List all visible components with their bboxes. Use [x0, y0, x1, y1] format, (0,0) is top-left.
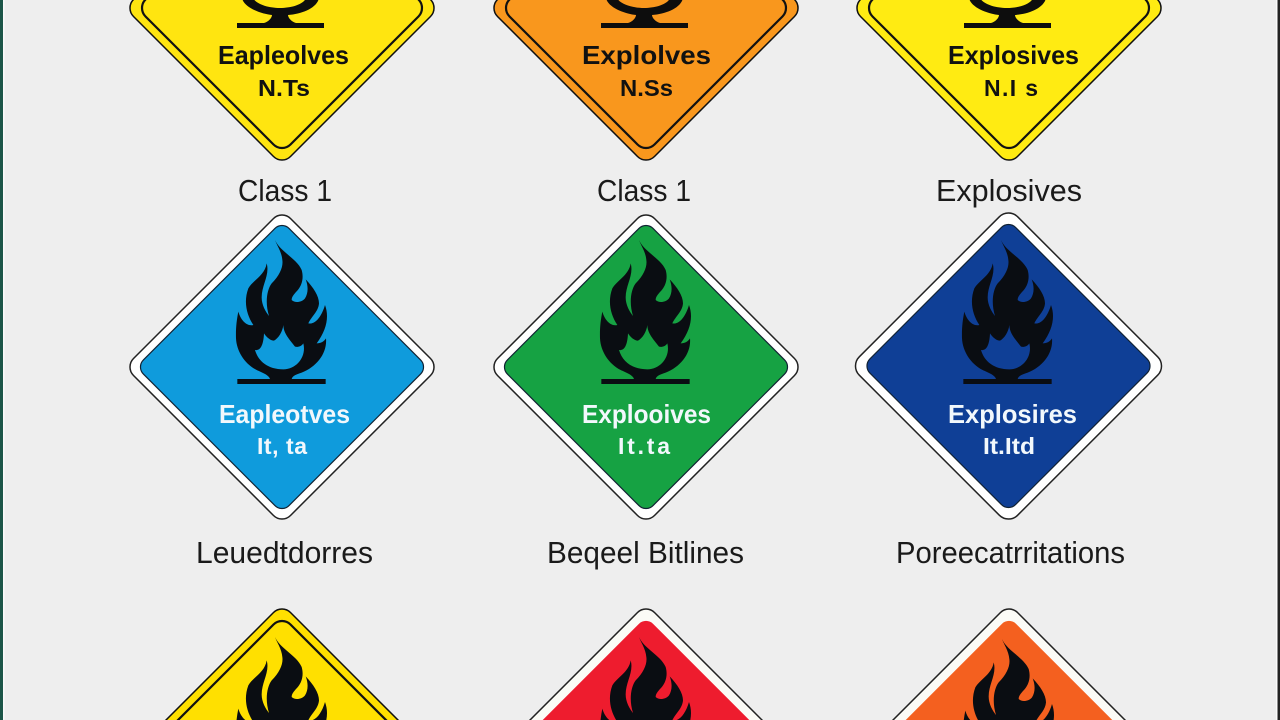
sign text: Explosives — [948, 40, 1079, 70]
icon: flame — [962, 240, 1053, 384]
label: Class 1, centre: Class 1 — [597, 173, 691, 208]
icon: explosion ring — [964, 0, 1051, 28]
icon: flame — [600, 240, 691, 384]
sign text: Eapleolves — [218, 40, 349, 70]
icon: explosion ring — [601, 0, 688, 28]
icon: flame — [600, 637, 691, 720]
label: Beqeel Bitlines: Beqeel Bitlines — [547, 535, 744, 570]
sign: yellow explosives, top right — [852, 0, 1166, 165]
sign: green flammable, middle centre — [489, 210, 803, 524]
sign: yellow explosives, top left — [125, 0, 439, 165]
sign code: It.ta — [618, 433, 670, 459]
sign: blue flammable, middle left — [125, 210, 439, 524]
sign code: N.Ts — [258, 75, 310, 101]
sign: orange explosives, top centre — [489, 0, 803, 165]
sign: red flammable, bottom centre — [489, 604, 803, 720]
sign: yellow flammable, bottom left — [125, 604, 439, 720]
sign text: Explosires — [948, 399, 1077, 429]
sign text: Eapleotves — [219, 399, 350, 429]
label: Poreecatrritations: Poreecatrritations — [896, 535, 1125, 570]
icon: explosion ring — [237, 0, 324, 28]
sign text: Explolves — [582, 40, 711, 70]
sign code: It.Itd — [983, 433, 1035, 459]
sign code: It, ta — [257, 433, 307, 459]
sign: orange flammable, bottom right — [852, 604, 1166, 720]
label: Class 1, left: Class 1 — [238, 173, 332, 208]
icon: flame — [236, 637, 327, 720]
sign code: N.Ss — [620, 75, 673, 101]
icon: flame — [236, 240, 327, 384]
sign: navy flammable, middle right — [850, 208, 1167, 524]
sign code: N.I s — [984, 75, 1038, 101]
label: Explosives: Explosives — [936, 173, 1082, 208]
icon: flame — [963, 639, 1054, 720]
sign text: Explooives — [582, 399, 711, 429]
label: Leuedtdorres: Leuedtdorres — [196, 535, 373, 570]
